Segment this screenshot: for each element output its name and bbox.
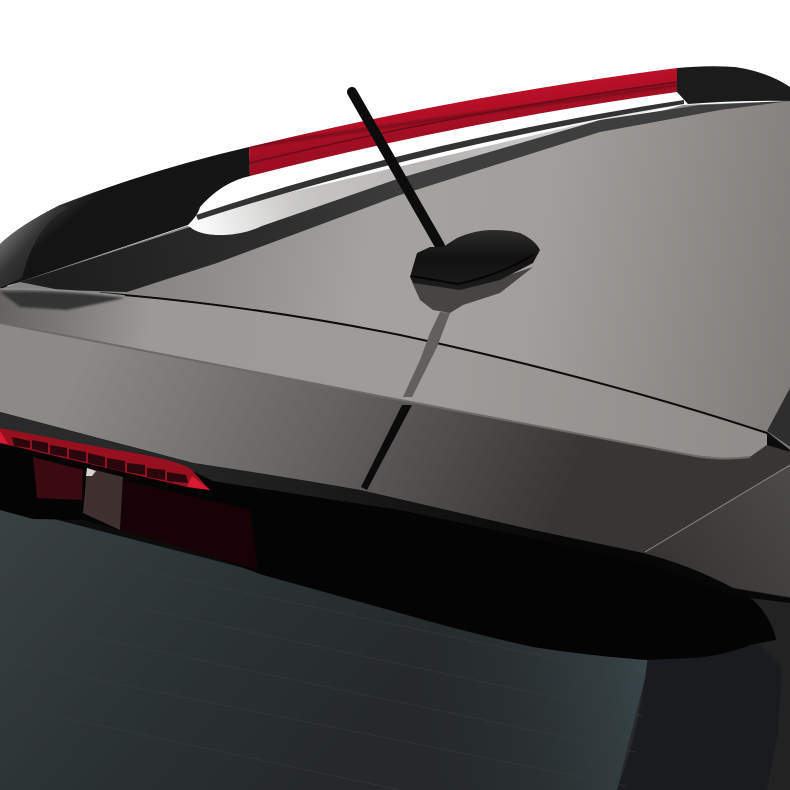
seam shadow patch (0, 292, 125, 310)
lid lower lip (0, 412, 790, 603)
dark reflection band (20, 101, 790, 292)
body side below lid (700, 588, 790, 790)
brake light (0, 428, 210, 490)
light strip under rail (188, 100, 684, 235)
spoiler black right section (677, 66, 790, 104)
black glass band (0, 412, 776, 660)
rear lid lower panel (0, 323, 790, 600)
spoiler inner rail (196, 100, 684, 220)
spoiler outer rim (0, 205, 68, 288)
roof panel (0, 100, 790, 452)
spoiler red section (249, 68, 677, 176)
window right dark section (617, 640, 782, 790)
antenna base (410, 230, 540, 290)
antenna base reflection (412, 267, 533, 313)
seam highlight left (0, 289, 125, 296)
panel seam line (100, 293, 790, 451)
window (0, 505, 782, 790)
spoiler red groove (250, 82, 677, 163)
antenna mast (352, 92, 440, 246)
base ridge (411, 255, 533, 284)
defroster lines (0, 540, 645, 790)
light tips (0, 431, 210, 490)
crease line (0, 323, 750, 459)
corner highlight line (645, 465, 790, 552)
spoiler black left section (0, 147, 250, 288)
dark car body underlay (0, 285, 790, 790)
rear lid band (0, 289, 767, 459)
right pillar tab (767, 388, 790, 447)
antenna reflection (361, 312, 450, 490)
lid right corner (645, 465, 790, 600)
spoiler (0, 66, 790, 288)
interior reflection (33, 457, 258, 570)
